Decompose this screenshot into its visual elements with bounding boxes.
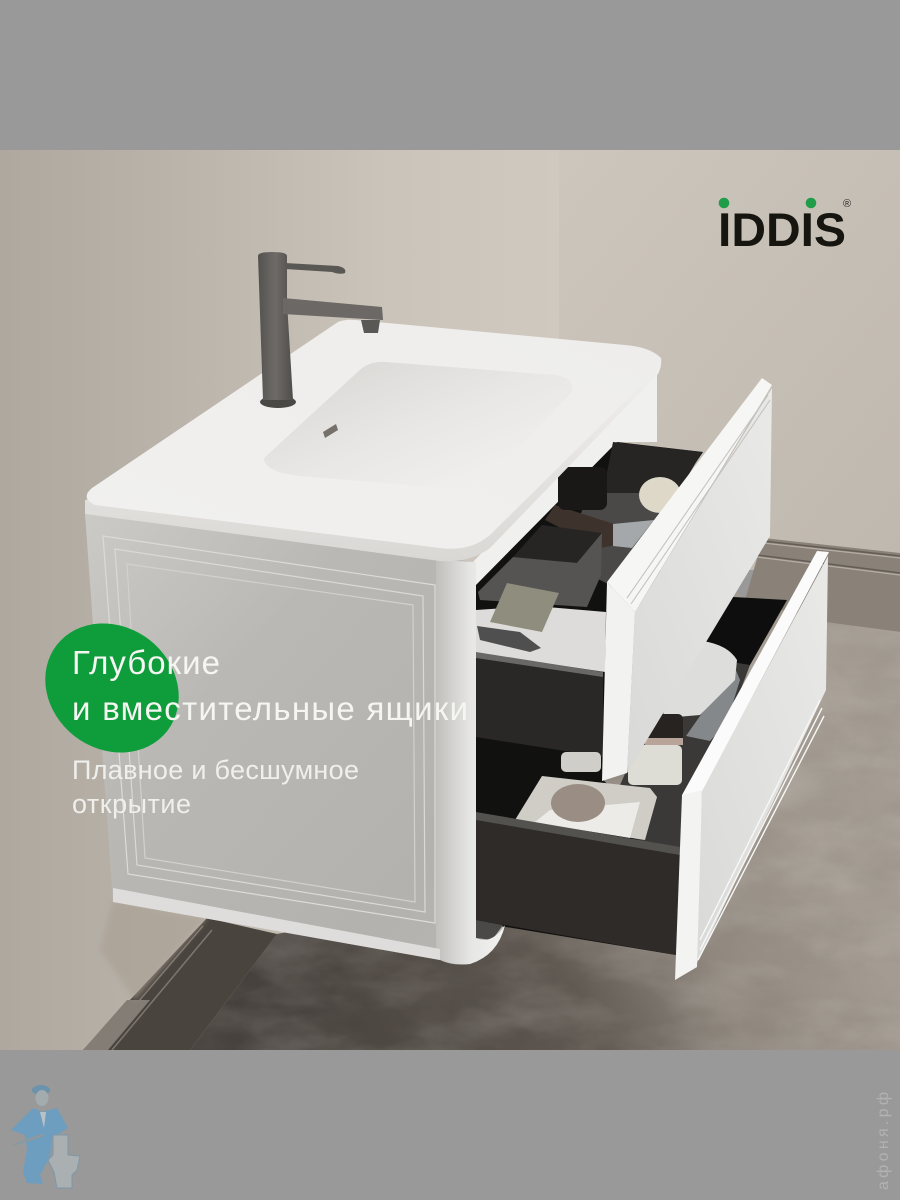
upper drawer back: [603, 442, 702, 493]
overflow drain: [323, 424, 338, 438]
heading: и вместительные ящики: [72, 690, 468, 727]
lower drawer: [675, 551, 829, 980]
floor: [190, 560, 900, 1050]
drawer cavity: [476, 442, 703, 955]
basin: [264, 362, 572, 488]
logo wordmark: IDDIS: [718, 203, 846, 256]
registered mark: ®: [843, 198, 851, 210]
plumber face: [36, 1090, 48, 1106]
right baseboard: [745, 538, 900, 632]
faucet base: [260, 396, 296, 408]
jar: [628, 714, 683, 785]
faucet aerator: [361, 320, 380, 333]
plumber shirt: [40, 1112, 46, 1128]
floor marble veining: [199, 782, 806, 1050]
lower drawer face: [695, 556, 828, 967]
organiser box: [478, 525, 602, 607]
faucet body: [258, 252, 293, 400]
bottom grey band: [0, 1050, 900, 1200]
product photo: [0, 150, 900, 1050]
upper drawer front wall: [476, 655, 603, 757]
watermark: афоня.рф: [875, 1092, 892, 1190]
lower drawer edge: [476, 812, 680, 855]
faucet: [258, 252, 383, 408]
green circle accent: [19, 597, 205, 779]
upper drawer ribs: [627, 395, 770, 604]
plumber body: [11, 1108, 68, 1184]
panel moulding: [103, 536, 435, 923]
ceramic countertop: [85, 320, 661, 561]
upper drawer: [602, 378, 772, 781]
lower drawer top edge: [682, 551, 829, 795]
lower drawer back top: [706, 597, 787, 665]
cabinet back strip: [470, 372, 657, 585]
upper drawer side strip: [602, 582, 635, 781]
dark round item: [558, 467, 607, 510]
grey rolled towel: [686, 668, 740, 741]
heading: Глубокие: [72, 644, 220, 681]
dark comb: [477, 626, 541, 652]
white rolled towel: [662, 641, 737, 718]
glass bottle: [490, 583, 559, 632]
IDDIS logo: [718, 198, 851, 256]
subheading: Плавное и бесшумное: [72, 755, 359, 785]
lower drawer front wall: [476, 815, 680, 955]
lower drawer floor: [620, 662, 750, 847]
top grey band: [0, 0, 900, 150]
cabinet bottom edge: [113, 888, 440, 960]
cabinet side panel: [85, 514, 505, 964]
wall shadow under cabinet: [100, 900, 207, 1000]
upper drawer face: [627, 388, 772, 773]
subheading: открытие: [72, 789, 191, 819]
plumber hair: [32, 1085, 50, 1095]
lower drawer ribs: [698, 700, 824, 960]
vanity cabinet: [85, 252, 829, 980]
ceramic tray: [515, 776, 657, 840]
right wall: [559, 150, 900, 570]
plumber wrench: [13, 1135, 43, 1145]
upper drawer top edge: [607, 378, 772, 612]
icon: plumber mascot with toilet: [11, 1085, 80, 1188]
left baseboard: [83, 918, 277, 1050]
left wall: [0, 150, 560, 1050]
countertop rim: [85, 358, 661, 561]
upper drawer floor: [564, 493, 660, 584]
lower drawer side strip: [675, 790, 702, 980]
upper drawer edge: [476, 652, 603, 677]
cabinet rounded corner: [436, 560, 505, 964]
folded white towel: [476, 606, 606, 672]
countertop surface: [87, 320, 661, 549]
dark handle item: [545, 505, 617, 548]
faucet lever: [285, 263, 345, 274]
toilet: [48, 1135, 80, 1188]
faucet spout: [283, 298, 383, 320]
logo dot left: [719, 198, 729, 208]
cavity base: [476, 920, 503, 940]
natural sponge: [639, 477, 681, 513]
logo dot right: [806, 198, 816, 208]
second jar: [561, 752, 601, 772]
grey towel: [613, 520, 654, 548]
